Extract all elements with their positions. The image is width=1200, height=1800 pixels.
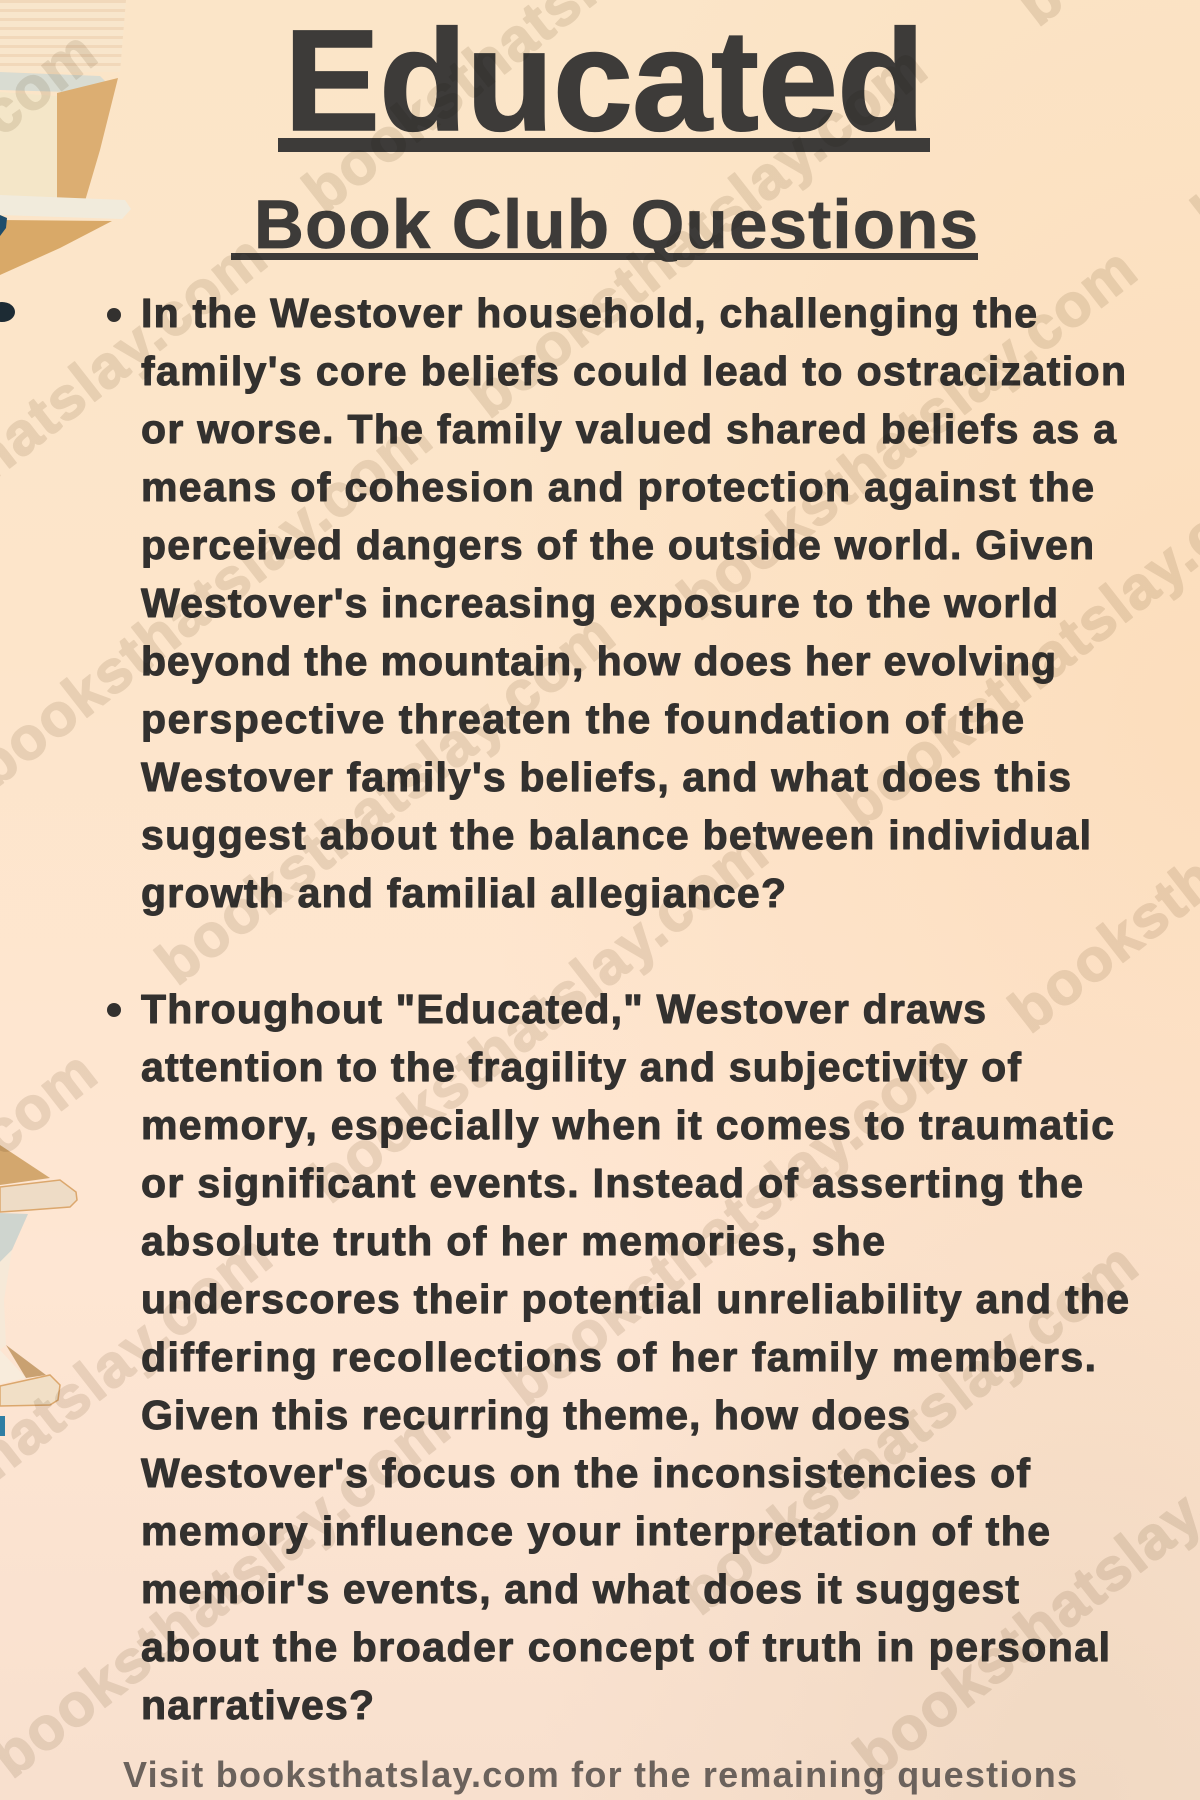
question 2 <box>107 986 1129 1728</box>
question 1 text: or worse. The family valued shared beliefs as a <box>141 406 1117 452</box>
question 1 text: perceived dangers of the outside world. Given <box>141 522 1094 568</box>
question 2 text: memoir's events, and what does it suggest <box>141 1566 1019 1612</box>
question 2 text: attention to the fragility and subjectivity of <box>141 1044 1021 1090</box>
subtitle: Book Club Questions <box>254 186 978 263</box>
question 1 text: means of cohesion and protection against the <box>141 464 1094 510</box>
question 1 text: Westover's increasing exposure to the world <box>141 580 1058 626</box>
watermarks: booksthatslay.com <box>492 1021 974 1418</box>
question 2 text: memory influence your interpretation of the <box>141 1508 1050 1554</box>
question 1 text: beyond the mountain, how does her evolving <box>141 638 1056 684</box>
question 1 text: suggest about the balance between individual <box>141 812 1091 858</box>
title: Educated <box>284 0 925 161</box>
question 2 text: absolute truth of her memories, she <box>141 1218 885 1264</box>
watermarks: booksthatslay.com <box>667 1230 1149 1627</box>
question 1 text: growth and familial allegiance? <box>141 870 786 916</box>
question 1 text <box>141 290 1126 916</box>
bullet 1 <box>107 308 121 322</box>
question 2 text: Throughout "Educated," Westover draws <box>141 986 986 1032</box>
question 1 <box>107 290 1126 916</box>
question 2 text <box>141 986 1129 1728</box>
question 2 text: or significant events. Instead of asserting the <box>141 1160 1083 1206</box>
illustration: upper book stack <box>0 0 131 322</box>
watermarks: booksthatslay.com <box>666 235 1148 632</box>
watermarks: booksthatslay.com <box>297 818 779 1215</box>
question 2 text: Westover's focus on the inconsistencies of <box>141 1450 1030 1496</box>
question 1 text: perspective threaten the foundation of the <box>141 696 1024 742</box>
footer note: Visit booksthatslay.com for the remaining questions <box>123 1754 1077 1795</box>
illustration: lower book stack <box>0 1145 77 1436</box>
question 2 text: underscores their potential unreliability and the <box>141 1276 1129 1322</box>
bullet 2 <box>107 1003 121 1017</box>
question 2 text: memory, especially when it comes to traumatic <box>141 1102 1114 1148</box>
question 1 text: Westover family's beliefs, and what does this <box>141 754 1071 800</box>
question 1 text: family's core beliefs could lead to ostracization <box>141 348 1126 394</box>
question 2 text: narratives? <box>141 1682 374 1728</box>
question 1 text: In the Westover household, challenging the <box>141 290 1037 336</box>
question 2 text: Given this recurring theme, how does <box>141 1392 910 1438</box>
watermarks: booksthatslay.com <box>144 600 626 997</box>
watermarks: booksthatslay.com <box>456 33 938 430</box>
question 2 text: about the broader concept of truth in personal <box>141 1624 1110 1670</box>
question 2 text: differing recollections of her family members. <box>141 1334 1096 1380</box>
